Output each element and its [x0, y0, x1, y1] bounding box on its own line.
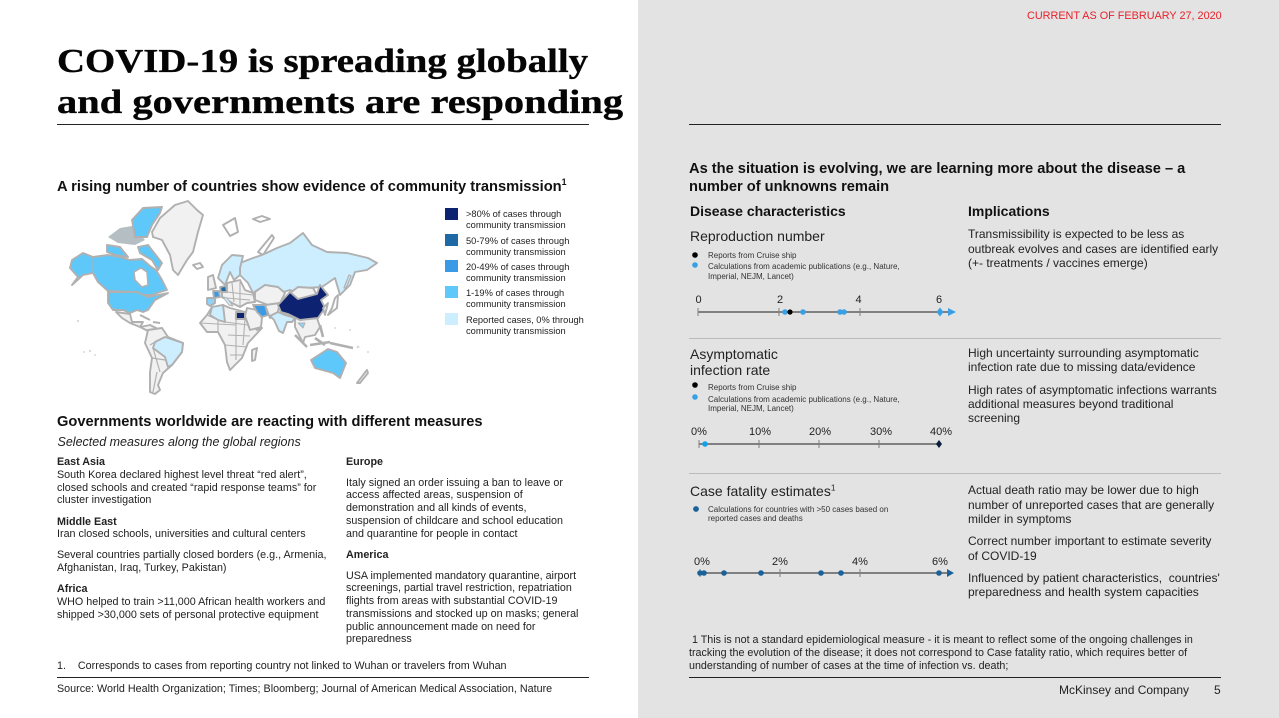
implications: fatality 2: Correct number important to estimate severity	[968, 534, 1211, 548]
implications: asymptomatic 1	[968, 346, 1199, 374]
implications: fatality 1	[968, 483, 1214, 526]
label: asymptomatic: infection rate	[690, 362, 770, 378]
world map	[69, 200, 378, 395]
chart: reproduction number axis: 2	[777, 294, 783, 306]
heading: government measures: Governments worldwide are reacting with different measures	[57, 414, 483, 430]
legend label: 50-79%: 50-79% of cases through	[466, 236, 569, 246]
text block: America: preparedness	[346, 633, 412, 645]
implications: fatality 3	[968, 571, 1220, 599]
legend: asymptomatic	[692, 382, 900, 413]
label: case fatality: Case fatality estimates1	[690, 482, 836, 499]
implications: reproduction: Transmissibility is expected to be less as	[968, 227, 1184, 241]
legend label: 1-19%: community transmission	[466, 299, 566, 309]
legend label: 20-49%: community transmission	[466, 273, 566, 283]
text block: America heading: America	[346, 548, 388, 560]
column heading: implications: Implications	[968, 203, 1050, 219]
legend text: academic: Imperial, NEJM, Lancet)	[708, 404, 794, 413]
legend label: 50-79%	[466, 236, 569, 257]
legend label: reported	[466, 315, 584, 336]
text block: America: public announcement made on need for	[346, 621, 535, 633]
implications: asymptomatic 2	[968, 383, 1217, 425]
legend swatch: 20-49%	[445, 260, 458, 272]
label: asymptomatic	[690, 346, 778, 378]
text block: Europe: demonstration and all kinds of events,	[346, 502, 526, 514]
right heading	[689, 161, 1186, 195]
footer rule right	[689, 677, 1221, 678]
chart: case fatality axis: 6%	[932, 556, 948, 568]
implications: fatality 2: of COVID-19	[968, 549, 1037, 563]
footnote right: understanding of number of cases at the time of infection vs. death;	[689, 660, 1008, 672]
text block: Europe: and quarantine for people in contact	[346, 528, 518, 540]
chart: reproduction number axis: 6	[936, 294, 942, 306]
text block: Europe: access affected areas, suspension of	[346, 489, 523, 501]
legend label: 1-19%	[466, 288, 566, 309]
legend text: academic: Imperial, NEJM, Lancet)	[708, 272, 794, 281]
chart: case fatality axis: 4%	[852, 556, 868, 568]
text block: Middle East: Iran closed schools, universities and cultural centers	[57, 528, 306, 540]
text block: closed borders: Afghanistan, Iraq, Turkey, Pakistan)	[57, 562, 226, 574]
footer: page number: 5	[1214, 683, 1221, 697]
title: COVID-19 is spreading globally	[57, 43, 588, 80]
footnote left: 1. Corresponds to cases from reporting country not linked to Wuhan or travelers from Wuhan	[57, 660, 507, 672]
heading: community transmission: A rising number of countries show evidence of community transmission1	[57, 177, 567, 195]
chart: asymptomatic axis: 0%	[691, 426, 707, 438]
row divider 2	[689, 473, 1221, 474]
implications: reproduction: outbreak evolves and cases are identified early	[968, 242, 1218, 256]
legend swatch: 1-19%	[445, 286, 458, 298]
text block: East Asia: closed schools and created “rapid response teams” for	[57, 482, 316, 494]
text block: America: transmissions and stocked up on masks; general	[346, 608, 578, 620]
legend dot: cruise	[692, 252, 698, 258]
legend dot: academic	[692, 394, 698, 400]
subheading: selected measures: Selected measures along the global regions	[58, 435, 301, 449]
footer: company: McKinsey and Company	[1059, 683, 1189, 697]
legend label: 50-79%: community transmission	[466, 247, 566, 257]
chart: asymptomatic axis: 40%	[930, 426, 952, 438]
text block: Middle East: Middle East	[57, 516, 117, 528]
chart: case fatality axis: 2%	[772, 556, 788, 568]
legend label: >80%	[466, 209, 566, 230]
column heading: disease characteristics: Disease characteristics	[690, 203, 846, 219]
title: and governments are responding	[57, 84, 623, 120]
text block: Europe	[346, 476, 563, 540]
label: asymptomatic: Asymptomatic	[690, 346, 778, 362]
implications: fatality 1: number of unreported cases that are generally	[968, 498, 1214, 512]
legend text: academic	[708, 394, 900, 413]
chart: reproduction number axis	[695, 294, 956, 316]
legend text: cruise: Reports from Cruise ship	[708, 382, 796, 392]
text block: East Asia: South Korea declared highest level threat “red alert”,	[57, 469, 307, 481]
legend label: reported: community transmission	[466, 326, 566, 336]
row divider 1	[689, 338, 1221, 339]
right heading: number of unknowns remain	[689, 179, 889, 195]
implications: fatality 3: preparedness and health system capacities	[968, 585, 1199, 599]
legend label: reported: Reported cases, 0% through	[466, 315, 584, 325]
chart: reproduction number axis: 0	[695, 294, 702, 306]
title rule left	[57, 124, 589, 125]
chart: asymptomatic axis: 20%	[809, 426, 831, 438]
title rule right	[689, 124, 1221, 125]
implications: asymptomatic 2: screening	[968, 411, 1020, 425]
chart: asymptomatic axis: 30%	[870, 426, 892, 438]
legend text: academic: Calculations from academic publications (e.g., Nature,	[708, 394, 900, 404]
text block: Africa: shipped >30,000 sets of personal protective equipment	[57, 608, 318, 620]
map legend	[445, 208, 584, 336]
currency date note: CURRENT AS OF FEBRUARY 27, 2020	[1027, 10, 1222, 22]
chart: case fatality axis	[694, 556, 954, 577]
text block: Africa: Africa	[57, 582, 87, 594]
legend dot: academic	[692, 262, 698, 268]
chart: asymptomatic axis	[691, 426, 952, 448]
implications: asymptomatic 2: additional measures beyond traditional	[968, 397, 1173, 411]
source line: Source: World Health Organization; Times; Bloomberg; Journal of American Medical Association, Nature	[57, 683, 552, 695]
implications: reproduction: (+- treatments / vaccines emerge)	[968, 256, 1148, 270]
label: reproduction number: Reproduction number	[690, 228, 825, 244]
legend text: academic: Calculations from academic publications (e.g., Nature,	[708, 262, 900, 271]
text block: East Asia: cluster investigation	[57, 494, 151, 506]
text block: closed borders	[57, 549, 326, 574]
text block: America: screenings, partial travel restriction, repatriation	[346, 582, 572, 594]
legend label: 20-49%: 20-49% of cases through	[466, 262, 569, 272]
legend text: academic	[708, 262, 900, 281]
title	[57, 43, 623, 120]
legend text: countries	[708, 505, 888, 523]
text block: Africa: WHO helped to train >11,000 African health workers and	[57, 596, 325, 608]
legend text: cruise: Reports from Cruise ship	[708, 250, 796, 260]
legend text: countries: Calculations for countries with >50 cases based on	[708, 505, 888, 514]
chart: case fatality axis: 0%	[694, 556, 710, 568]
legend swatch: reported	[445, 313, 458, 325]
implications: asymptomatic 1: infection rate due to missing data/evidence	[968, 360, 1195, 374]
legend swatch: >80%	[445, 208, 458, 220]
legend: case fatality	[693, 505, 888, 523]
text block: Europe: Italy signed an order issuing a ban to leave or	[346, 476, 563, 488]
text block: East Asia	[57, 456, 316, 506]
implications: asymptomatic 2: High rates of asymptomatic infections warrants	[968, 383, 1217, 397]
chart: asymptomatic axis: 10%	[749, 426, 771, 438]
implications: fatality 1: Actual death ratio may be lower due to high	[968, 483, 1199, 497]
footnote rule	[57, 677, 589, 678]
text block: America: USA implemented mandatory quarantine, airport	[346, 570, 576, 582]
text block: closed borders: Several countries partially closed borders (e.g., Armenia,	[57, 549, 326, 561]
text block: Middle East	[57, 516, 306, 540]
implications: fatality 2	[968, 534, 1212, 563]
implications: reproduction	[968, 227, 1218, 270]
legend label: >80%: >80% of cases through	[466, 209, 561, 219]
footnote right: tracking the evolution of the disease; it does not correspond to Case fatality ratio, which requires better of	[689, 647, 1187, 659]
text block: America: flights from areas with substantial COVID-19	[346, 595, 558, 607]
text block: America	[346, 570, 578, 645]
implications: fatality 3: Influenced by patient characteristics, countries'	[968, 571, 1220, 585]
text block: East Asia: East Asia	[57, 456, 105, 468]
text block: Africa	[57, 582, 325, 620]
footnote right	[689, 634, 1193, 673]
right heading: As the situation is evolving, we are learning more about the disease – a	[689, 161, 1185, 177]
implications: fatality 1: milder in symptoms	[968, 512, 1071, 526]
implications: asymptomatic 1: High uncertainty surrounding asymptomatic	[968, 346, 1199, 360]
legend label: 20-49%	[466, 262, 569, 283]
legend text: countries: reported cases and deaths	[708, 514, 803, 523]
text block: Europe heading: Europe	[346, 456, 383, 468]
panel: right grey background	[638, 0, 1279, 718]
legend dot: countries	[693, 506, 699, 512]
legend: reproduction	[692, 250, 900, 281]
legend label: 1-19%: 1-19% of cases through	[466, 288, 564, 298]
chart: reproduction number axis: 4	[855, 294, 862, 306]
legend label: >80%: community transmission	[466, 220, 566, 230]
footnote right: 1 This is not a standard epidemiological measure - it is meant to reflect some of the ongoing challenges in	[692, 634, 1193, 646]
legend swatch: 50-79%	[445, 234, 458, 246]
legend dot: cruise	[692, 382, 698, 388]
text block: Europe: suspension of childcare and school education	[346, 515, 563, 527]
